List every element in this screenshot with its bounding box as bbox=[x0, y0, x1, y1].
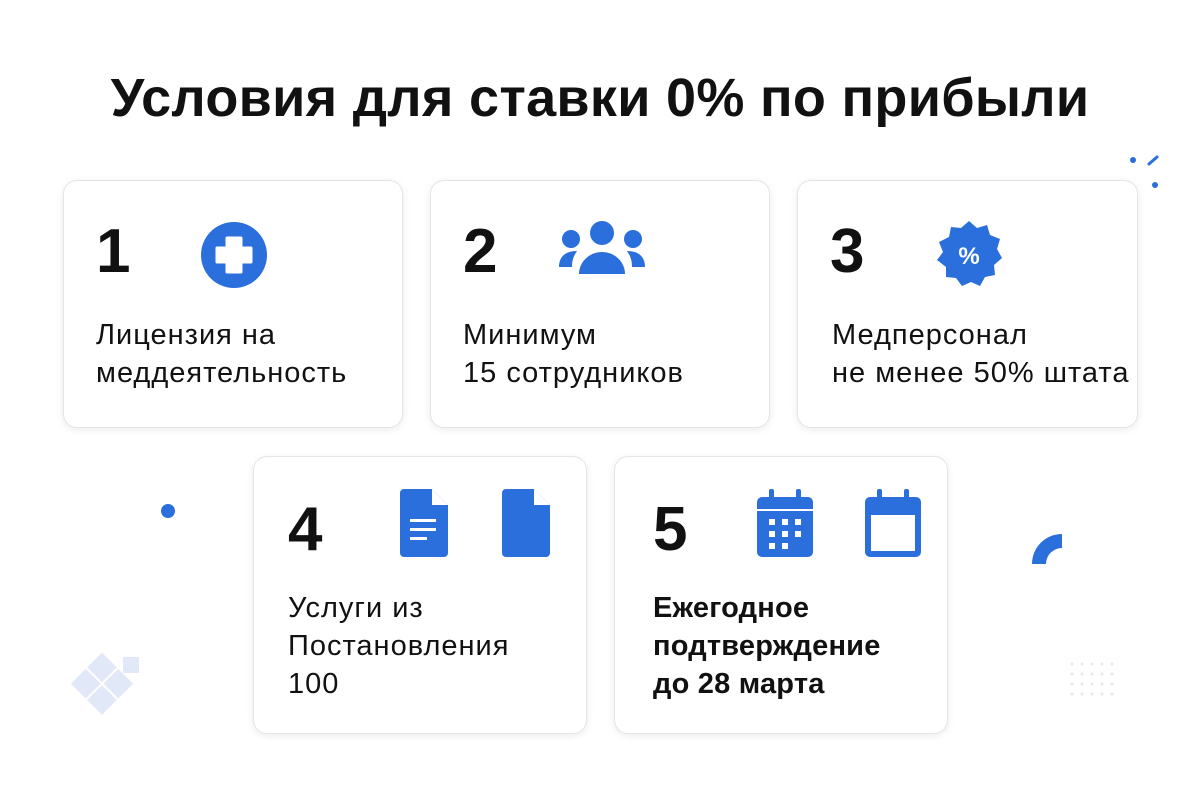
number 3: 3 bbox=[830, 217, 864, 286]
text: не менее 50% штата bbox=[832, 357, 1130, 389]
card 4 bbox=[253, 456, 587, 734]
decor: dots top right bbox=[1130, 155, 1159, 188]
card 5 bbox=[614, 456, 948, 734]
text: Медперсонал bbox=[832, 319, 1028, 351]
text bbox=[463, 319, 684, 389]
icon: medical plus bbox=[201, 222, 267, 288]
text: до 28 марта bbox=[653, 668, 825, 700]
text: Ежегодное bbox=[653, 592, 809, 624]
text bbox=[96, 319, 347, 389]
icon: people bbox=[559, 221, 645, 274]
text bbox=[288, 592, 509, 700]
number 4: 4 bbox=[288, 495, 322, 564]
text bbox=[832, 319, 1130, 389]
number 1: 1 bbox=[96, 217, 130, 286]
card 2 bbox=[430, 180, 770, 428]
decor: quarter arc right bbox=[1032, 534, 1062, 564]
text: 15 сотрудников bbox=[463, 357, 684, 389]
icon: document blank bbox=[502, 489, 550, 557]
text: Услуги из bbox=[288, 592, 424, 624]
text: Минимум bbox=[463, 319, 597, 351]
text bbox=[653, 592, 881, 700]
icon: percent badge: % bbox=[958, 243, 980, 270]
card 1 bbox=[63, 180, 403, 428]
text: Лицензия на bbox=[96, 319, 276, 351]
card 3 bbox=[797, 180, 1138, 428]
text: меддеятельность bbox=[96, 357, 347, 389]
icon: calendar grid bbox=[757, 489, 813, 557]
text: Постановления bbox=[288, 630, 509, 662]
icon: calendar blank bbox=[865, 489, 921, 557]
decor: diamonds bottom left bbox=[71, 653, 139, 714]
decor: dot grid bbox=[1070, 662, 1114, 696]
icon: document with lines bbox=[400, 489, 448, 557]
decor: dot left bbox=[161, 504, 175, 518]
number 5: 5 bbox=[653, 495, 687, 564]
number 2: 2 bbox=[463, 217, 497, 286]
title: Условия для ставки 0% по прибыли bbox=[111, 68, 1089, 128]
text: подтверждение bbox=[653, 630, 881, 662]
text: 100 bbox=[288, 668, 339, 700]
icon: percent badge bbox=[937, 221, 1002, 286]
